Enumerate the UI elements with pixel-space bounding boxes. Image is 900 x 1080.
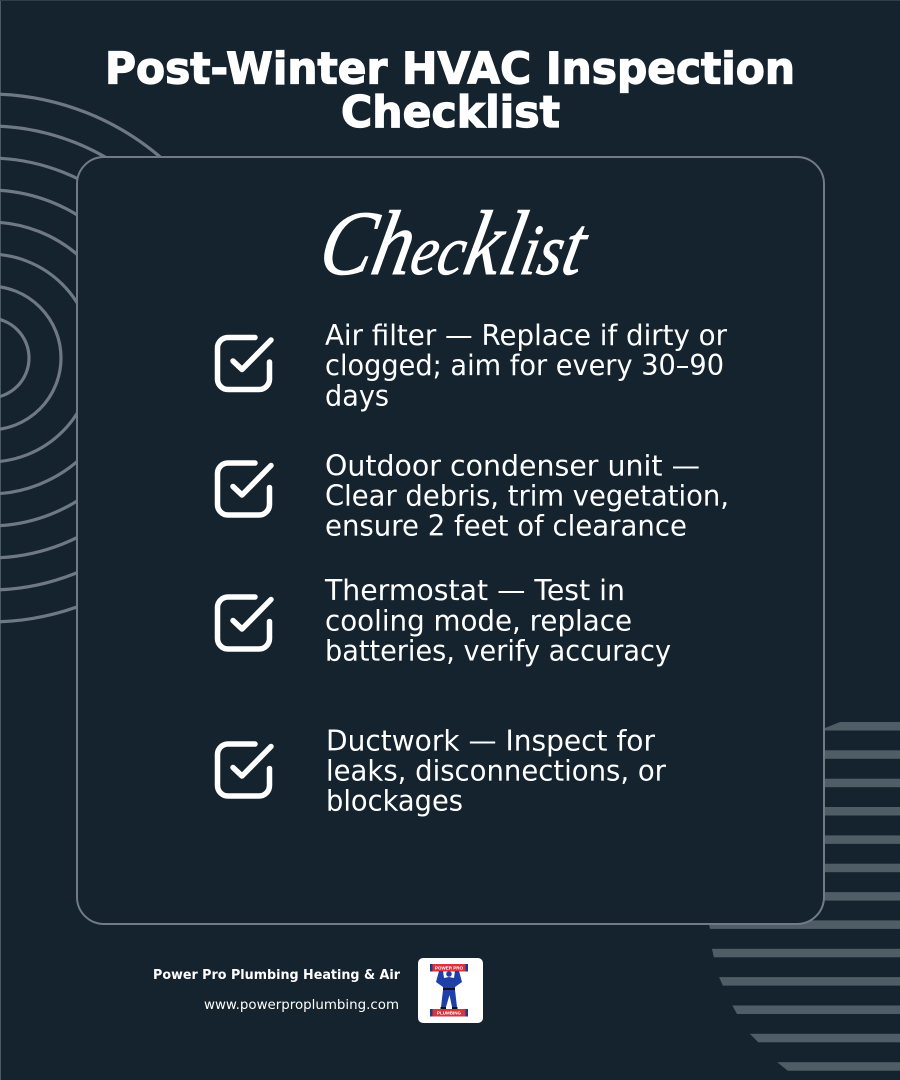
title: Post-Winter HVAC Inspection bbox=[105, 44, 795, 94]
checklist item: thermostat: cooling mode, replace bbox=[325, 604, 632, 638]
checklist item: ductwork: Ductwork — Inspect for bbox=[326, 724, 655, 758]
title: Checklist bbox=[341, 87, 560, 138]
checklist item: thermostat bbox=[218, 574, 671, 668]
checklist item: air filter bbox=[218, 319, 727, 412]
checklist item: outdoor condenser unit bbox=[218, 450, 729, 542]
checklist item: thermostat: batteries, verify accuracy bbox=[325, 634, 671, 668]
checklist item: thermostat: Thermostat — Test in bbox=[324, 574, 625, 607]
icon: company logo: POWER PRO bbox=[435, 966, 463, 970]
checklist item: air filter: days bbox=[325, 380, 389, 412]
title bbox=[105, 44, 795, 138]
panel: checklist card bbox=[77, 157, 824, 924]
checklist item: ductwork bbox=[218, 724, 666, 818]
checklist item: ductwork: leaks, disconnections, or bbox=[326, 754, 666, 788]
icon: company logo bbox=[418, 958, 483, 1023]
checklist item: outdoor condenser unit: Outdoor condenser unit — bbox=[325, 450, 700, 482]
checklist item: outdoor condenser unit: Clear debris, trim vegetation, bbox=[325, 480, 729, 512]
icon: check box bbox=[218, 463, 271, 515]
script heading: Checklist bbox=[312, 193, 598, 295]
checklist item: ductwork: blockages bbox=[326, 784, 463, 818]
icon: company logo: PLUMBING bbox=[437, 1011, 461, 1016]
icon: check box bbox=[218, 338, 271, 390]
footer website: www.powerproplumbing.com bbox=[204, 998, 399, 1013]
checklist item: outdoor condenser unit: ensure 2 feet of clearance bbox=[325, 510, 687, 542]
checklist item: air filter: clogged; aim for every 30–90 bbox=[325, 349, 724, 382]
icon: check box bbox=[218, 597, 271, 649]
icon: check box bbox=[218, 744, 271, 796]
footer company name: Power Pro Plumbing Heating & Air bbox=[153, 968, 401, 983]
checklist item: air filter: Air filter — Replace if dirty or bbox=[325, 319, 727, 352]
